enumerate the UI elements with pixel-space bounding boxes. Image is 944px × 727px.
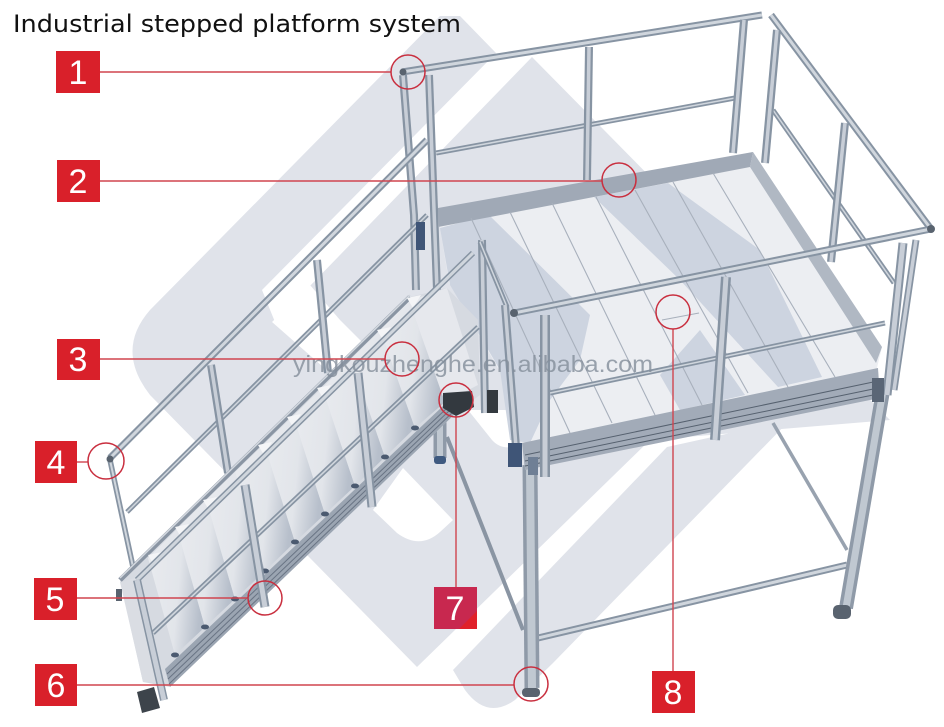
front platform guardrail	[106, 68, 935, 477]
callout 8: 8	[664, 674, 682, 712]
icon: deck corner brackets	[508, 443, 522, 467]
callout 4	[35, 441, 124, 483]
callout 6	[35, 664, 548, 706]
callout 5: 5	[46, 581, 64, 619]
callout 5	[34, 578, 282, 620]
callout 2: 2	[69, 163, 87, 201]
deck shadow bands	[440, 183, 822, 443]
staircase treads	[120, 288, 480, 687]
icon: rail end connectors	[106, 68, 935, 462]
website watermark: yingkouzhenghe.en.alibaba.com	[293, 351, 653, 377]
callout 7	[434, 383, 477, 629]
tread bolts	[171, 426, 419, 658]
tread nosing tips	[148, 295, 421, 565]
platform deck	[438, 152, 882, 470]
callout 1: 1	[69, 54, 87, 92]
title: Industrial stepped platform system	[13, 10, 461, 38]
callout 6: 6	[47, 667, 65, 705]
callout 4: 4	[47, 444, 65, 482]
deck front fascia	[522, 368, 880, 470]
background watermark shape	[132, 16, 890, 708]
staircase far guardrail	[110, 140, 427, 567]
platform support frame	[434, 385, 884, 697]
callout 1	[56, 51, 425, 93]
icon: stair foot bracket	[137, 687, 160, 713]
callout 3: 3	[69, 341, 87, 379]
callout 7: 7	[446, 590, 464, 628]
stair side stringer	[165, 406, 458, 687]
stair end panel	[120, 578, 165, 683]
staircase near guardrail	[116, 240, 507, 713]
icon: stair head bracket	[443, 391, 474, 416]
callout 8	[652, 295, 695, 713]
rear platform guardrail	[402, 15, 931, 290]
callout 2	[57, 160, 636, 202]
callout 3	[57, 339, 419, 380]
